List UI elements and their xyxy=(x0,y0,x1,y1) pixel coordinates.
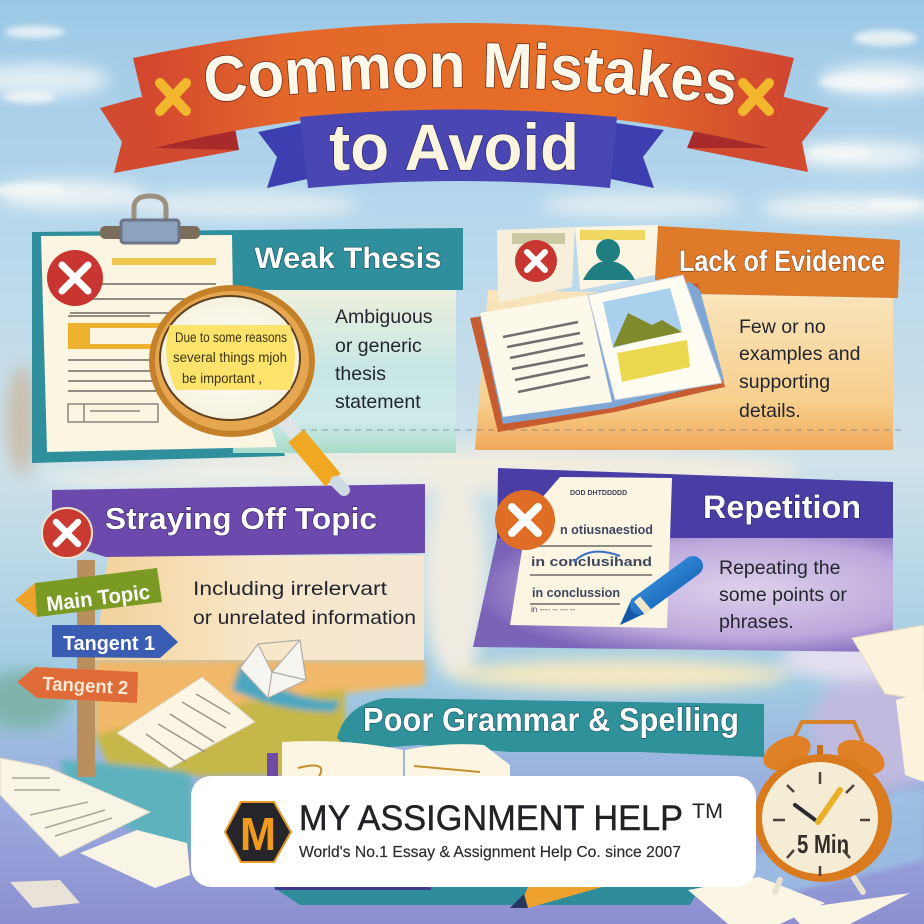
icon: pencil xyxy=(510,887,602,908)
paper: DOD DHTDDDDD xyxy=(570,490,627,497)
heading: Common Mistakes: Common Mistakes xyxy=(205,42,736,106)
description: or unrelated information xyxy=(193,607,416,629)
icon: cross badge xyxy=(42,508,92,558)
icon: blue pen xyxy=(620,566,693,625)
paper sheet: right upper xyxy=(852,625,924,700)
panel backing xyxy=(32,228,463,463)
icon: cross badge xyxy=(515,240,557,282)
signpost xyxy=(15,560,178,777)
header text: Poor Grammar & Spelling xyxy=(363,701,739,738)
sub ribbon xyxy=(300,110,617,188)
description: or generic xyxy=(335,335,422,357)
paper sheet: left lower xyxy=(0,758,150,857)
title banner xyxy=(100,23,829,188)
paper sheet: right middle xyxy=(896,692,924,782)
icon: crumpled paper xyxy=(240,640,306,698)
icon: magnifying glass xyxy=(149,285,344,490)
panel: Weak Thesis xyxy=(32,196,463,490)
header: Repetition: Repetition xyxy=(703,489,861,525)
magnified text: be important , xyxy=(182,371,262,387)
heading: to Avoid: to Avoid xyxy=(329,110,579,184)
icon: left cross xyxy=(160,83,186,111)
header: Weak Thesis: Weak Thesis xyxy=(254,242,442,275)
description: details. xyxy=(739,400,801,422)
swirl bands xyxy=(60,660,924,895)
icon: clipboard clip xyxy=(100,196,200,243)
description: Few or no xyxy=(739,316,826,338)
paper sheet: bottom right xyxy=(688,877,825,924)
logo card: My Assignment Help xyxy=(191,776,756,887)
teal shadow under book xyxy=(270,885,702,905)
paper xyxy=(510,477,672,628)
papers xyxy=(497,225,658,303)
paper: in conclussion xyxy=(532,585,620,600)
dashed stitch xyxy=(466,429,905,431)
paper sheet: bottom far right xyxy=(787,893,910,924)
paper sheet: near signpost xyxy=(117,677,255,768)
clock label: 5 Min xyxy=(797,829,849,859)
paper sheet: left centre xyxy=(80,830,190,888)
clipboard paper xyxy=(41,235,277,452)
brand name: MY ASSIGNMENT HELP xyxy=(299,799,683,838)
header: Lack of Evidence: Lack of Evidence xyxy=(679,245,885,278)
description: Including irrelervart xyxy=(193,578,388,600)
icon: right cross xyxy=(743,83,769,111)
header: Straying Off Topic: Straying Off Topic xyxy=(105,501,377,536)
icon: open book xyxy=(470,275,725,432)
description: examples and xyxy=(739,343,860,365)
description: phrases. xyxy=(719,611,794,633)
paper sheet: small bottom left xyxy=(10,880,80,908)
main ribbon xyxy=(133,23,794,148)
sign: Main Topic xyxy=(15,568,162,617)
panel header band xyxy=(655,226,900,298)
description: Ambiguous xyxy=(335,306,433,328)
paper: in conclusihand xyxy=(531,554,652,569)
panel body xyxy=(475,290,893,450)
magnified text: Due to some reasons xyxy=(175,330,287,346)
panel: Poor Grammar & Spelling xyxy=(267,698,764,905)
panel: Lack of Evidence xyxy=(466,225,905,450)
loose papers xyxy=(0,625,924,924)
sign: Tangent 2: Tangent 2 xyxy=(42,674,129,699)
paper: in ---- -- --- -- xyxy=(531,605,576,614)
tagline: World's No.1 Essay & Assignment Help Co. since 2007 xyxy=(299,844,681,861)
ribbon tails xyxy=(100,97,829,173)
dashed stitch xyxy=(300,429,460,431)
panel body xyxy=(233,290,456,453)
sign: Tangent 1 xyxy=(52,625,178,658)
panel: Straying Off Topic xyxy=(15,484,425,777)
icon: person silhouette xyxy=(583,239,635,280)
description: supporting xyxy=(739,371,830,393)
description: some points or xyxy=(719,584,847,606)
header band xyxy=(337,698,764,757)
icon: open book xyxy=(267,741,510,890)
magnified text: several things mjoh xyxy=(173,350,287,366)
panel header band xyxy=(52,484,425,557)
sign: Main Topic: Main Topic xyxy=(45,581,152,616)
sign: Tangent 1: Tangent 1 xyxy=(63,633,155,655)
panel body xyxy=(95,555,424,660)
icon: alarm clock with 5 Min xyxy=(754,722,892,892)
panel header band xyxy=(497,468,893,538)
panel body xyxy=(473,538,893,652)
trademark: TM xyxy=(692,800,723,823)
sign: Tangent 2 xyxy=(17,667,138,703)
description: thesis xyxy=(335,363,386,385)
paper: n otiusnaestiod xyxy=(560,522,653,537)
sub ribbon tails xyxy=(258,123,664,188)
description: Repeating the xyxy=(719,557,840,579)
icon: orange cross badge xyxy=(495,490,555,550)
description: statement xyxy=(335,391,421,413)
panel: Repetition xyxy=(473,468,893,652)
icon: hexagon logo xyxy=(225,802,291,862)
icon: red cross badge xyxy=(47,250,103,306)
icon: hexagon logo: M xyxy=(240,808,276,860)
